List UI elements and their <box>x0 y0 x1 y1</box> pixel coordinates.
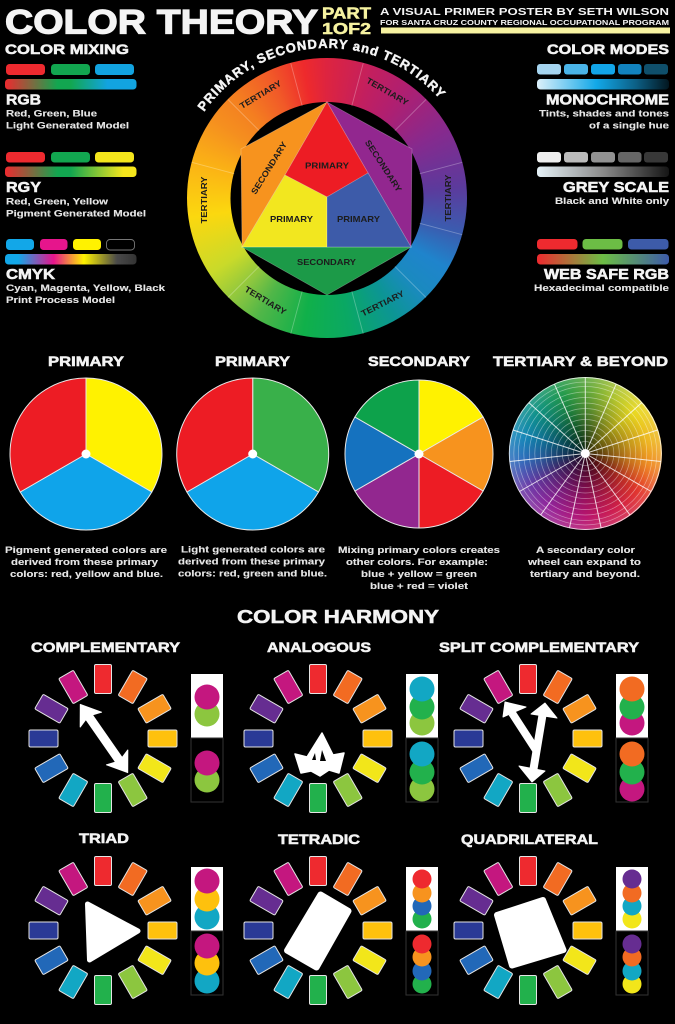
panel: RGB <box>5 64 136 130</box>
subtitle: A VISUAL PRIMER POSTER BY SETH WILSON <box>380 6 669 18</box>
panel: grey scale <box>537 152 669 206</box>
pie: red green blue <box>177 378 329 530</box>
panel: grey scale: Black and White only <box>555 196 669 206</box>
panel: RGY: Red, Green, Yellow <box>6 196 109 206</box>
caption: mixing <box>338 545 500 591</box>
caption: tertiary: A secondary color <box>536 545 636 555</box>
shape: square <box>497 900 564 966</box>
wheel: split complementary <box>454 664 602 812</box>
panel: RGY: Pigment Generated Model <box>6 208 146 218</box>
heading: triad: TRIAD <box>79 830 129 846</box>
tertiary labels: TERTIARY <box>238 78 283 111</box>
caption: tertiary <box>527 545 642 579</box>
panel: RGB: RGB <box>6 92 41 108</box>
panel: RGB: Red, Green, Blue <box>6 108 97 118</box>
heading: tertiary and beyond: TERTIARY & BEYOND <box>493 353 668 369</box>
panel: web safe RGB: Hexadecimal compatible <box>534 283 669 293</box>
caption: mixing: blue + yellow = green <box>361 569 477 579</box>
curved heading: PRIMARY, SECONDARY and TERTIARY <box>197 38 446 112</box>
heading: analogous: ANALOGOUS <box>267 639 371 655</box>
panel: CMYK: CMYK <box>6 267 56 283</box>
heading: complementary: COMPLEMENTARY <box>31 639 181 655</box>
swatches: quadrilateral <box>616 867 648 995</box>
inner shape labels: SECONDARY <box>297 257 356 267</box>
caption: pigment <box>5 545 167 579</box>
panel: web safe RGB <box>534 239 669 293</box>
panel: RGY: RGY <box>6 180 41 196</box>
swatches: triad <box>191 867 223 995</box>
heading: tetradic: TETRADIC <box>278 831 360 847</box>
panel: RGY <box>5 152 146 218</box>
wheel: triad <box>29 856 177 1004</box>
tertiary labels: TERTIARY <box>199 176 209 224</box>
swatches: split complementary <box>616 674 648 802</box>
inner shape labels: PRIMARY <box>337 214 380 224</box>
swatches: complementary <box>191 674 223 802</box>
wheel: quadrilateral <box>454 856 602 1004</box>
panel: CMYK <box>5 239 166 305</box>
wheel: complementary <box>29 664 177 812</box>
part label: 1OF2 <box>322 21 371 38</box>
caption: tertiary: wheel can expand to <box>527 557 642 567</box>
pie: tertiary wheel <box>509 377 662 530</box>
caption: mixing: other colors. For example: <box>346 557 488 567</box>
inner shape labels: SECONDARY <box>363 138 404 194</box>
heading: color modes: COLOR MODES <box>547 41 669 57</box>
heading: split complementary: SPLIT COMPLEMENTARY <box>439 639 640 655</box>
caption: light <box>178 544 327 578</box>
part label: PART <box>322 6 371 22</box>
caption: light: Light generated colors are <box>181 544 325 554</box>
part label <box>322 6 371 38</box>
heading: primary pigment: PRIMARY <box>48 353 125 369</box>
tertiary labels: TERTIARY <box>359 288 406 318</box>
title: COLOR THEORY <box>5 4 318 42</box>
pie: red yellow blue <box>10 378 162 530</box>
panel: grey scale: GREY SCALE <box>563 180 669 196</box>
caption: light: derived from these primary <box>178 556 325 566</box>
panel: monochrome: Tints, shades and tones <box>539 108 669 118</box>
panel: web safe RGB: WEB SAFE RGB <box>544 267 669 283</box>
caption: pigment: colors: red, yellow and blue. <box>10 569 163 579</box>
tertiary labels: TERTIARY <box>243 284 289 317</box>
heading: secondary: SECONDARY <box>368 353 471 369</box>
swatches: analogous <box>406 674 438 802</box>
caption: mixing: blue + red = violet <box>370 581 468 591</box>
heading: quadrilateral: QUADRILATERAL <box>461 831 599 847</box>
arrow: complementary <box>70 697 138 780</box>
inner shape labels: PRIMARY <box>270 214 313 224</box>
panel: CMYK: Cyan, Magenta, Yellow, Black <box>6 283 166 293</box>
heading: color harmony: COLOR HARMONY <box>237 606 440 627</box>
shape: triangle <box>88 904 138 960</box>
caption: light: colors: red, green and blue. <box>178 568 327 578</box>
panel: monochrome: of a single hue <box>589 120 669 130</box>
caption: tertiary: tertiary and beyond. <box>530 569 640 579</box>
main color wheel <box>187 58 467 338</box>
heading: primary light: PRIMARY <box>215 353 291 369</box>
tertiary labels: TERTIARY <box>443 174 453 222</box>
caption: pigment: Pigment generated colors are <box>5 545 167 555</box>
arrows: analogous <box>295 733 344 776</box>
inner primary and secondary shapes <box>241 102 412 295</box>
caption: pigment: derived from these primary <box>11 557 158 567</box>
subtitle <box>380 6 670 34</box>
inner shape labels <box>249 138 404 267</box>
arrows: split complementary <box>503 702 557 782</box>
panel: CMYK: Print Process Model <box>6 295 115 305</box>
inner shape labels: PRIMARY <box>305 160 349 170</box>
tertiary labels <box>199 75 453 318</box>
wheel: tetradic <box>244 856 392 1004</box>
tertiary labels: TERTIARY <box>365 75 411 108</box>
heading: color mixing: COLOR MIXING <box>5 41 129 57</box>
inner shape labels: SECONDARY <box>249 140 289 196</box>
swatches: tetradic <box>406 867 438 995</box>
panel: RGB: Light Generated Model <box>6 120 129 130</box>
shape: rectangle <box>287 894 348 968</box>
panel: monochrome <box>537 64 669 130</box>
wheel: analogous <box>244 664 392 812</box>
panel: monochrome: MONOCHROME <box>546 92 669 108</box>
subtitle: FOR SANTA CRUZ COUNTY REGIONAL OCCUPATIONAL PROGRAM <box>380 18 669 27</box>
caption: mixing: Mixing primary colors creates <box>338 545 500 555</box>
pie: secondary six colors <box>345 380 493 528</box>
